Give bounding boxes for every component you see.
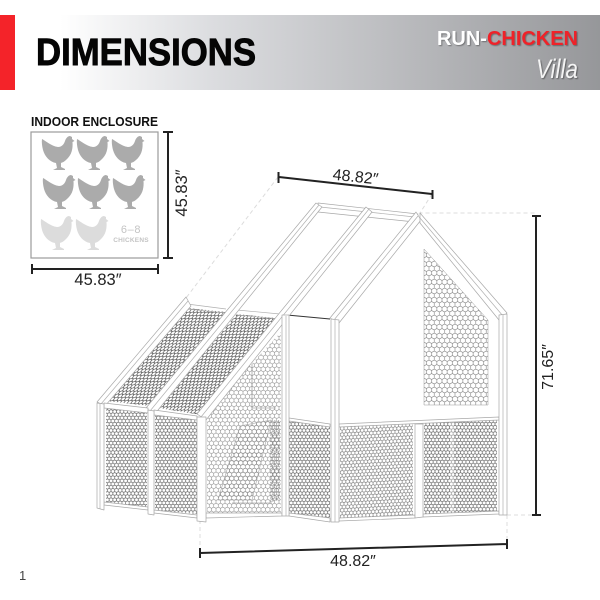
dimension: base width	[200, 539, 507, 570]
brand: Run-Chicken: RUN-CHICKEN	[437, 28, 578, 50]
illustration: chicken villa	[97, 203, 507, 522]
lower roof rails	[187, 304, 330, 319]
red accent bar	[0, 15, 15, 90]
dimension: enclosure width	[32, 264, 158, 289]
dimension: roof depth: 48.82″	[332, 167, 379, 188]
indoor enclosure heading: INDOOR ENCLOSURE	[31, 114, 158, 129]
dimension: roof depth	[278, 167, 432, 199]
top roof rails	[318, 203, 418, 222]
dimension: enclosure width: 45.83″	[74, 271, 122, 289]
dimension: height: 71.65″	[540, 344, 557, 390]
upper vent mesh	[424, 249, 488, 405]
roof mesh panels	[107, 308, 276, 415]
brand: Villa: Villa	[536, 54, 578, 84]
icons: two optional chickens	[41, 216, 108, 250]
posts	[97, 314, 507, 522]
icons: six chickens	[42, 136, 146, 209]
capacity label: 6–8	[121, 224, 141, 236]
capacity label: CHICKENS	[113, 237, 149, 244]
page number: 1	[19, 568, 26, 583]
side mesh with ramp	[207, 332, 281, 513]
title: DIMENSIONS	[36, 32, 256, 74]
rafters	[97, 203, 507, 420]
front mesh panels	[106, 408, 497, 520]
dimension: base width: 48.82″	[330, 553, 376, 570]
banner background	[0, 15, 600, 90]
panel: indoor enclosure plan	[31, 132, 158, 258]
dimension: enclosure depth	[163, 132, 191, 258]
dimension: enclosure depth: 45.83″	[173, 169, 191, 217]
dimension: height	[532, 216, 557, 515]
front beams	[104, 403, 499, 522]
capacity label	[113, 224, 149, 244]
construction guide lines	[186, 177, 536, 553]
